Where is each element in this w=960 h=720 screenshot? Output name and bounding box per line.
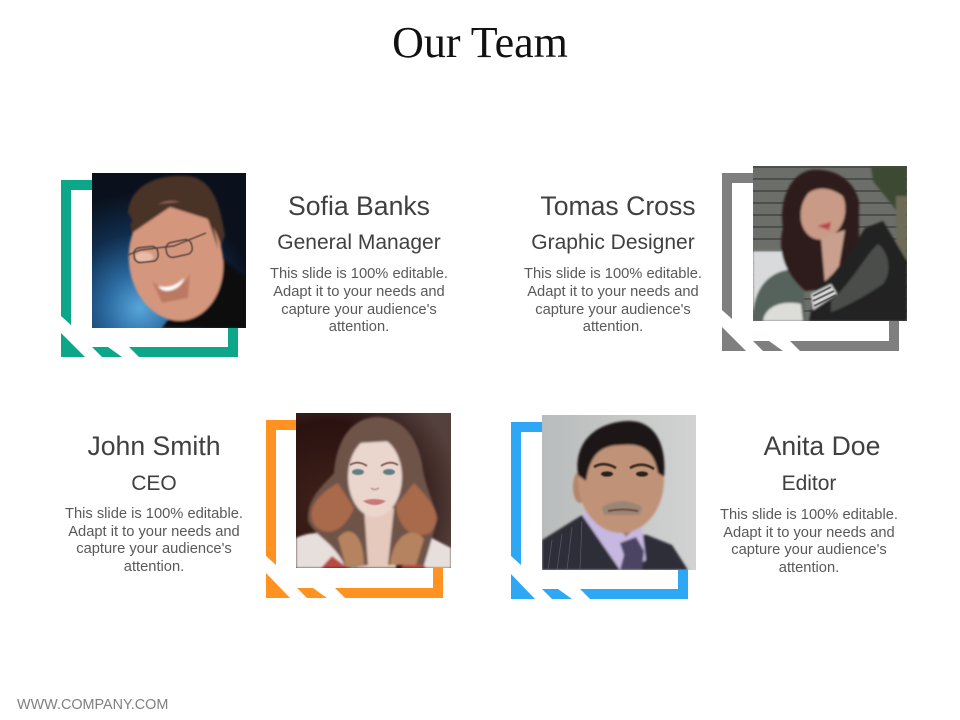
description: attention. [124,559,184,575]
name: Sofia Banks [288,191,430,221]
description [65,506,243,575]
role: Graphic Designer [531,231,695,254]
description: Adapt it to your needs and [68,524,240,540]
role: Editor [782,472,836,495]
panel: John Smith [65,413,451,598]
description: capture your audience's [76,541,232,557]
icon: orange bracket frame [266,420,443,598]
name: Tomas Cross [540,191,696,221]
portrait: man in pinstripe suit [542,415,696,570]
icon: gray bracket frame [722,173,899,351]
role: General Manager [277,231,441,254]
description: capture your audience's [281,302,437,318]
description [524,266,702,335]
description: Adapt it to your needs and [273,284,445,300]
description: Adapt it to your needs and [723,525,895,541]
title: Our Team [392,18,568,67]
role: CEO [131,472,177,495]
panel: Sofia Banks [61,173,448,357]
description: attention. [329,319,389,335]
panel: Tomas Cross [524,166,907,351]
description: attention. [583,319,643,335]
description: Adapt it to your needs and [527,284,699,300]
name: John Smith [87,431,221,461]
panel: Anita Doe [511,415,898,599]
description [720,507,898,576]
description: attention. [779,560,839,576]
description: This slide is 100% editable. [720,507,898,523]
footer: website: WWW.COMPANY.COM [17,697,168,713]
icon: green bracket frame [61,180,238,357]
description: This slide is 100% editable. [524,266,702,282]
description: capture your audience's [731,542,887,558]
description: This slide is 100% editable. [65,506,243,522]
description: This slide is 100% editable. [270,266,448,282]
portrait: woman with curly hair [296,413,451,568]
portrait: man with glasses [92,173,246,328]
description [270,266,448,335]
name: Anita Doe [764,431,880,461]
portrait: woman in leather jacket [753,166,907,321]
icon: blue bracket frame [511,422,688,599]
description: capture your audience's [535,302,691,318]
